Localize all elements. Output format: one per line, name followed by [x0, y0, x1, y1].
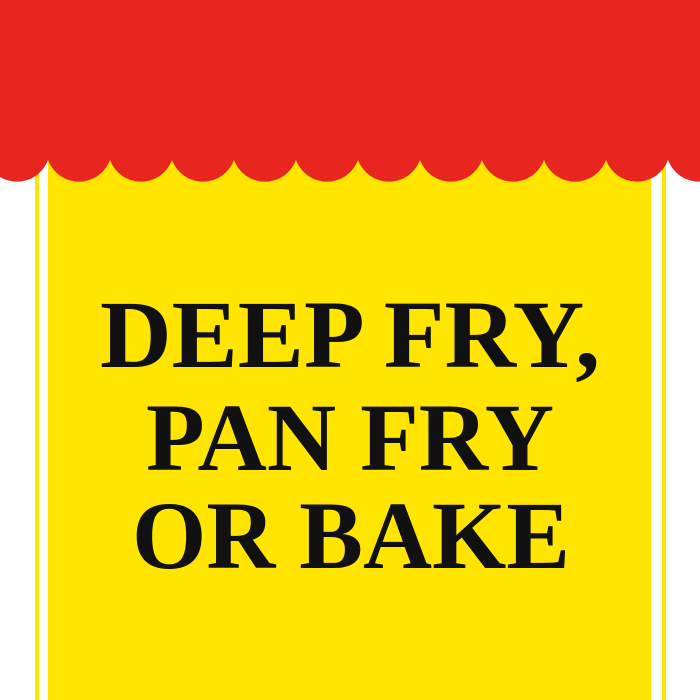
right thin yellow stripe — [662, 150, 666, 700]
title text — [100, 281, 600, 589]
yellow panel — [48, 150, 651, 700]
red awning with scallops — [0, 0, 700, 182]
title text: PAN FRY — [146, 384, 554, 491]
left thin yellow stripe — [35, 150, 39, 700]
title text: OR BAKE — [132, 482, 570, 589]
title text: DEEP FRY, — [100, 281, 600, 388]
